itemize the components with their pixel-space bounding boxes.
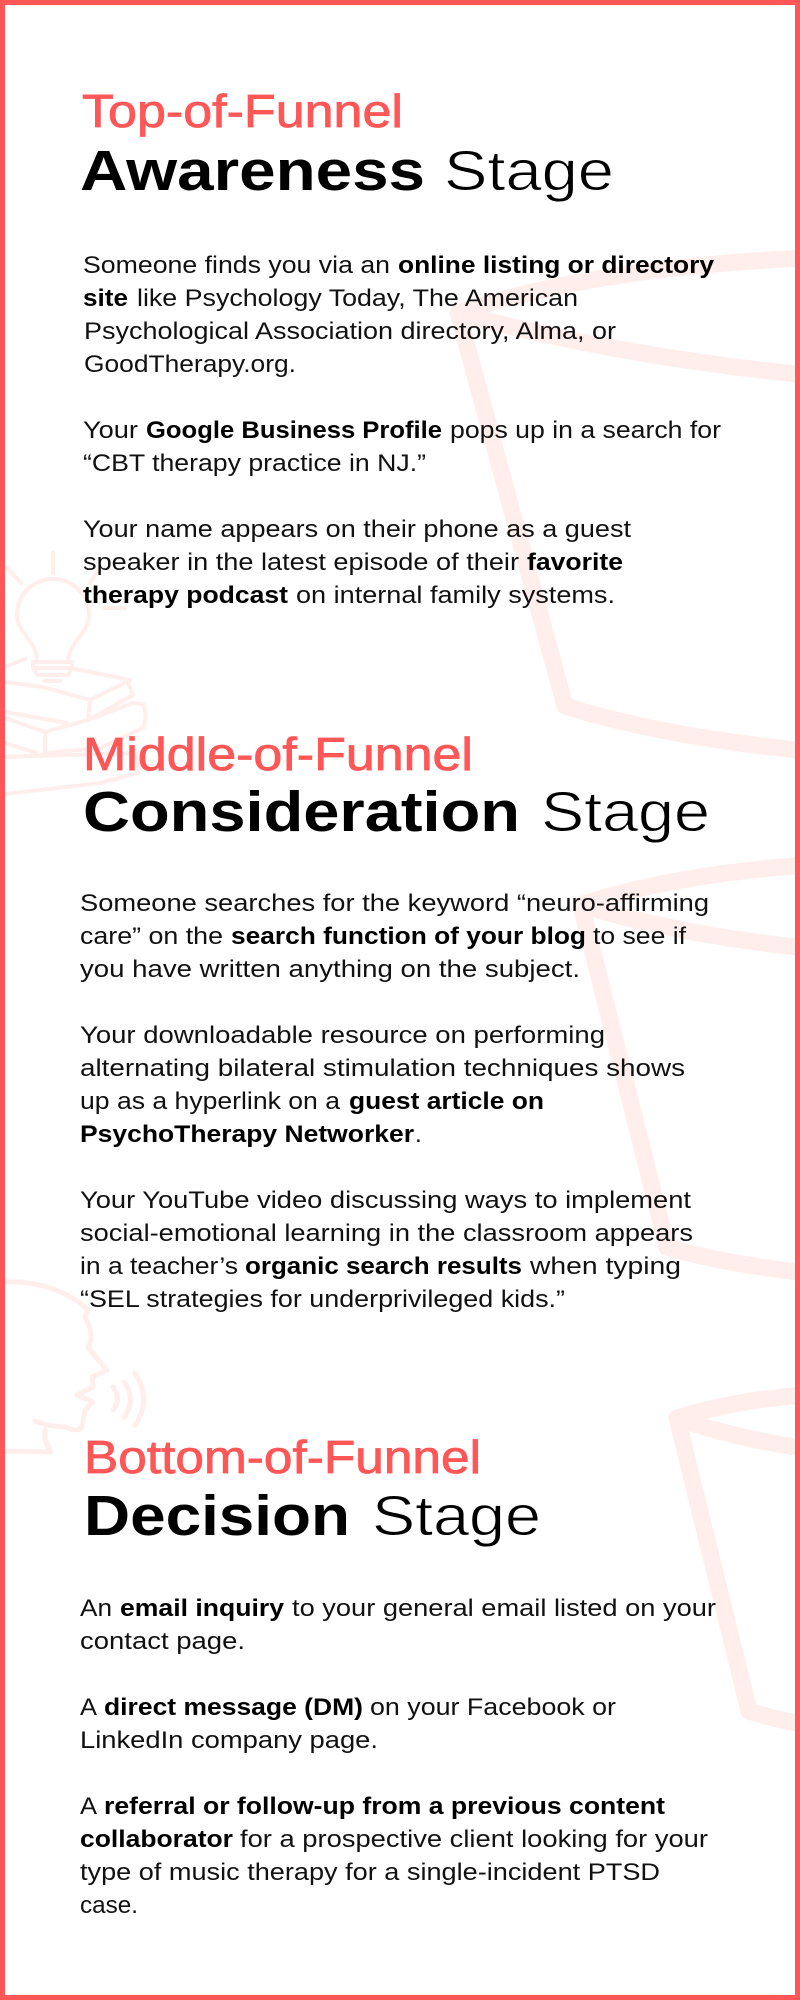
icon: funnel bottom <box>677 1395 800 1725</box>
text block: guest article: Your downloadable resource on performing <box>80 1022 605 1049</box>
text block: guest article: up as a hyperlink on a <box>80 1088 340 1115</box>
text block: listing: like Psychology Today, The American <box>137 285 578 312</box>
text block: email inquiry: to your general email listed on your <box>292 1595 716 1622</box>
text block: email inquiry: contact page. <box>80 1628 245 1655</box>
text block: youtube: organic search results <box>245 1253 522 1280</box>
text block: referral <box>80 1793 708 1919</box>
text block: youtube: in a teacher’s <box>80 1253 238 1280</box>
heading: Middle-of-Funnel: Middle-of-Funnel <box>83 728 473 780</box>
text block: direct message: on your Facebook or <box>370 1694 616 1721</box>
text block: listing: Psychological Association directory, Alma, or <box>84 318 616 345</box>
text block: direct message: direct message (DM) <box>104 1694 363 1721</box>
text block: podcast: on internal family systems. <box>296 582 615 609</box>
text block: referral: type of music therapy for a single-incident PTSD <box>80 1859 660 1886</box>
text block: youtube: “SEL strategies for underprivileged kids.” <box>80 1286 565 1313</box>
icon: funnel middle <box>581 865 800 1273</box>
panel: middle of funnel <box>80 728 710 1313</box>
text block: google business <box>83 417 721 477</box>
text block: guest article: alternating bilateral stimulation techniques shows <box>80 1055 685 1082</box>
heading: Bottom-of-Funnel: Bottom-of-Funnel <box>84 1431 481 1483</box>
text block: referral: collaborator <box>80 1826 233 1853</box>
text block: podcast: Your name appears on their phone as a guest <box>83 516 631 543</box>
text block: blog search <box>80 890 709 983</box>
text block: podcast <box>83 516 631 609</box>
text block: referral: A <box>80 1793 98 1820</box>
text block: blog search: care” on the <box>80 923 223 950</box>
text block: google business: pops up in a search for <box>450 417 721 444</box>
heading: Top-of-Funnel: Top-of-Funnel <box>82 85 403 137</box>
panel: bottom of funnel <box>80 1431 716 1919</box>
text block: direct message: LinkedIn company page. <box>80 1727 378 1754</box>
heading: Awareness Stage: Stage <box>444 139 614 203</box>
text block: podcast: favorite <box>527 549 623 576</box>
text block: podcast: speaker in the latest episode of their <box>83 549 519 576</box>
text block: listing: online listing or directory <box>398 252 714 279</box>
text block: youtube <box>80 1187 693 1313</box>
text block: google business: “CBT therapy practice in NJ.” <box>83 450 426 477</box>
text block: guest article: . <box>415 1121 422 1148</box>
text block: guest article: guest article on <box>349 1088 544 1115</box>
text block: listing <box>83 252 714 378</box>
text block: referral: referral or follow-up from a previous content <box>104 1793 665 1820</box>
text block: email inquiry: email inquiry <box>120 1595 284 1622</box>
heading: Awareness Stage <box>80 139 614 203</box>
heading: Consideration Stage: Stage <box>541 780 710 844</box>
text block: podcast: therapy podcast <box>83 582 288 609</box>
heading: Decision Stage <box>84 1484 541 1548</box>
text block: direct message <box>80 1694 616 1754</box>
icon: funnel top <box>458 258 800 751</box>
text block: guest article: PsychoTherapy Networker <box>80 1121 414 1148</box>
heading: Awareness Stage: Awareness <box>80 139 425 203</box>
text block: guest article <box>80 1022 685 1148</box>
text block: referral: for a prospective client looking for your <box>240 1826 708 1853</box>
text block: youtube: social-emotional learning in the classroom appears <box>80 1220 693 1247</box>
text block: blog search: Someone searches for the keyword “neuro-affirming <box>80 890 709 917</box>
text block: youtube: when typing <box>529 1253 681 1280</box>
text block: listing: Someone finds you via an <box>83 252 390 279</box>
icon: speaking head <box>5 1282 144 1452</box>
text block: blog search: you have written anything on the subject. <box>80 956 580 983</box>
heading: Consideration Stage <box>83 780 710 844</box>
panel: top of funnel <box>80 85 721 609</box>
text block: blog search: to see if <box>593 923 686 950</box>
text block: email inquiry: An <box>80 1595 112 1622</box>
icon: light bulb on books <box>5 553 146 794</box>
text block: google business: Your <box>83 417 138 444</box>
text block: listing: site <box>83 285 128 312</box>
text block: direct message: A <box>80 1694 98 1721</box>
text block: listing: GoodTherapy.org. <box>84 351 296 378</box>
heading: Decision Stage: Decision <box>84 1484 350 1548</box>
text block: email inquiry <box>80 1595 716 1655</box>
heading: Consideration Stage: Consideration <box>83 780 520 844</box>
text block: youtube: Your YouTube video discussing ways to implement <box>80 1187 691 1214</box>
heading: Decision Stage: Stage <box>372 1484 541 1548</box>
text block: referral: case. <box>80 1892 138 1919</box>
text block: google business: Google Business Profile <box>146 417 442 444</box>
text block: blog search: search function of your blog <box>231 923 586 950</box>
